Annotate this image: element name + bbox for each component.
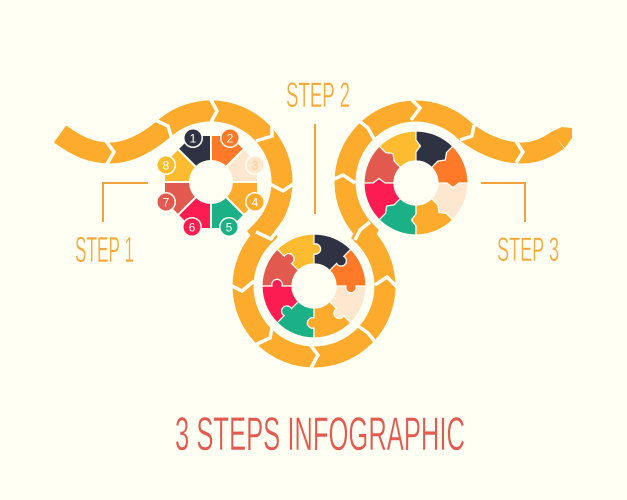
text: STEP 1 — [75, 229, 134, 270]
badge 3: 3 — [252, 158, 259, 172]
wheel 1: numbered octagon segments — [156, 128, 265, 237]
badge 4: 4 — [252, 196, 259, 210]
badge 1: 1 — [190, 132, 197, 146]
connector: step 2 — [314, 124, 316, 214]
wheel 3: angular puzzle segments — [353, 120, 479, 246]
badge 6: 6 — [189, 220, 196, 234]
label: step 3: STEP 3 — [497, 231, 559, 269]
badge 7: 7 — [163, 196, 170, 210]
badge 5: 5 — [226, 220, 233, 234]
wheel 2: rounded puzzle segments — [251, 223, 377, 349]
connector: step 1 — [103, 183, 148, 222]
badge 2: 2 — [227, 132, 234, 146]
arrow ribbon: curved chain of arrows around the three wheels — [60, 98, 572, 368]
label: step 2: STEP 2 — [286, 76, 350, 115]
badge 8: 8 — [163, 158, 170, 172]
connector: step 3 — [481, 183, 525, 222]
